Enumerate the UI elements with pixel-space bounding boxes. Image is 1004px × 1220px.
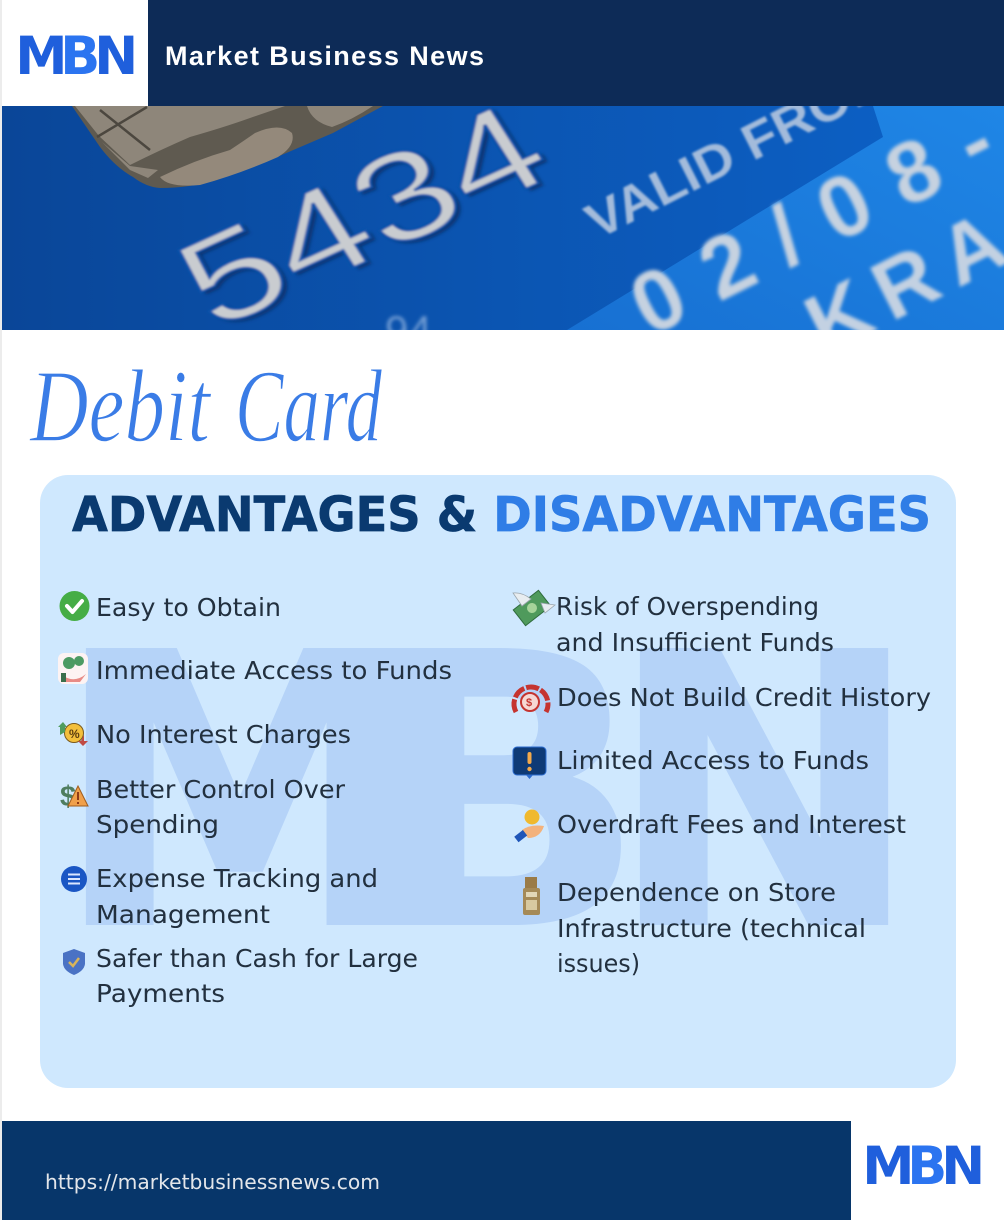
text: limited access: Limited Access to Funds	[557, 746, 869, 775]
logo: MBN	[15, 26, 138, 87]
column: disadvantages	[513, 590, 931, 978]
column: disadvantages: issues)	[557, 949, 640, 978]
footer logo: MBN: M	[862, 1136, 915, 1197]
logo: MBN: N	[94, 26, 138, 87]
column: advantages: Spending	[96, 810, 219, 839]
embossed number 5434	[178, 108, 548, 324]
footer logo: MBN: N	[941, 1136, 985, 1197]
watermark MBN: B	[358, 572, 648, 1015]
icon: alert speech bubble	[513, 747, 546, 779]
column: disadvantages: and Insufficient Funds	[556, 628, 834, 657]
footer logo: MBN: B	[907, 1136, 947, 1197]
watermark MBN: M	[51, 572, 429, 1015]
logo: MBN: M	[15, 26, 68, 87]
text: overdraft fees: Overdraft Fees and Interest	[557, 810, 906, 839]
embossed number 5434: 5434	[152, 77, 573, 355]
text: does not build credit: Does Not Build Credit History	[557, 683, 931, 712]
embossed date: 02/08-	[615, 92, 1004, 354]
text: no interest: No Interest Charges	[96, 720, 351, 749]
icon: shield	[63, 949, 85, 975]
text: dependence on store: Dependence on Store	[557, 878, 836, 907]
column: advantages: Management	[96, 900, 270, 929]
card photo banner	[2, 106, 1004, 330]
header bar	[2, 0, 1004, 106]
watermark MBN: N	[605, 572, 923, 1015]
column: advantages	[58, 591, 452, 1008]
footer url: https://marketbusinessnews.com	[45, 1170, 380, 1194]
footer bar	[2, 1121, 985, 1220]
text: safer than cash: Safer than Cash for Large	[96, 944, 418, 973]
icon: hand with coin	[514, 810, 544, 842]
text: better control: Better Control Over	[96, 775, 346, 804]
icon: green check	[60, 591, 90, 621]
icon: dollar warning	[60, 781, 88, 813]
icon: list circle	[61, 866, 87, 892]
footer logo: MBN	[862, 1136, 985, 1197]
icon: flying money	[513, 590, 555, 626]
embossed digits below: 94	[385, 307, 432, 354]
text: risk of overspending: Risk of Overspending	[556, 592, 819, 621]
watermark MBN	[51, 572, 923, 1015]
embossed number 5434: 5434	[157, 79, 578, 357]
column: advantages: Payments	[96, 979, 225, 1008]
icon: percent arrows	[58, 722, 88, 746]
text: immediate access: Immediate Access to Funds	[96, 656, 452, 685]
text: expense tracking: Expense Tracking and	[96, 864, 378, 893]
heading: ADVANTAGES & DISADVANTAGES	[72, 487, 931, 543]
chip	[72, 106, 383, 188]
script title: Card	[235, 349, 383, 464]
embossed text: valid from: VALID FROM	[577, 48, 901, 250]
icon: payment terminal	[523, 877, 540, 915]
column: disadvantages: Infrastructure (technical	[557, 914, 866, 943]
icon: money in hand	[58, 653, 88, 684]
icon: gauge: $	[526, 697, 532, 709]
script title	[28, 349, 383, 464]
logo: MBN: B	[60, 26, 100, 87]
icon: dollar warning: $	[60, 781, 76, 813]
text: easy to obtain: Easy to Obtain	[96, 593, 281, 622]
icon: percent arrows: %	[69, 727, 80, 741]
icon: gauge	[514, 687, 548, 712]
panel: advantages and disadvantages	[40, 475, 956, 1088]
script title: Debit	[28, 349, 212, 464]
header title: Market Business News	[165, 41, 484, 71]
